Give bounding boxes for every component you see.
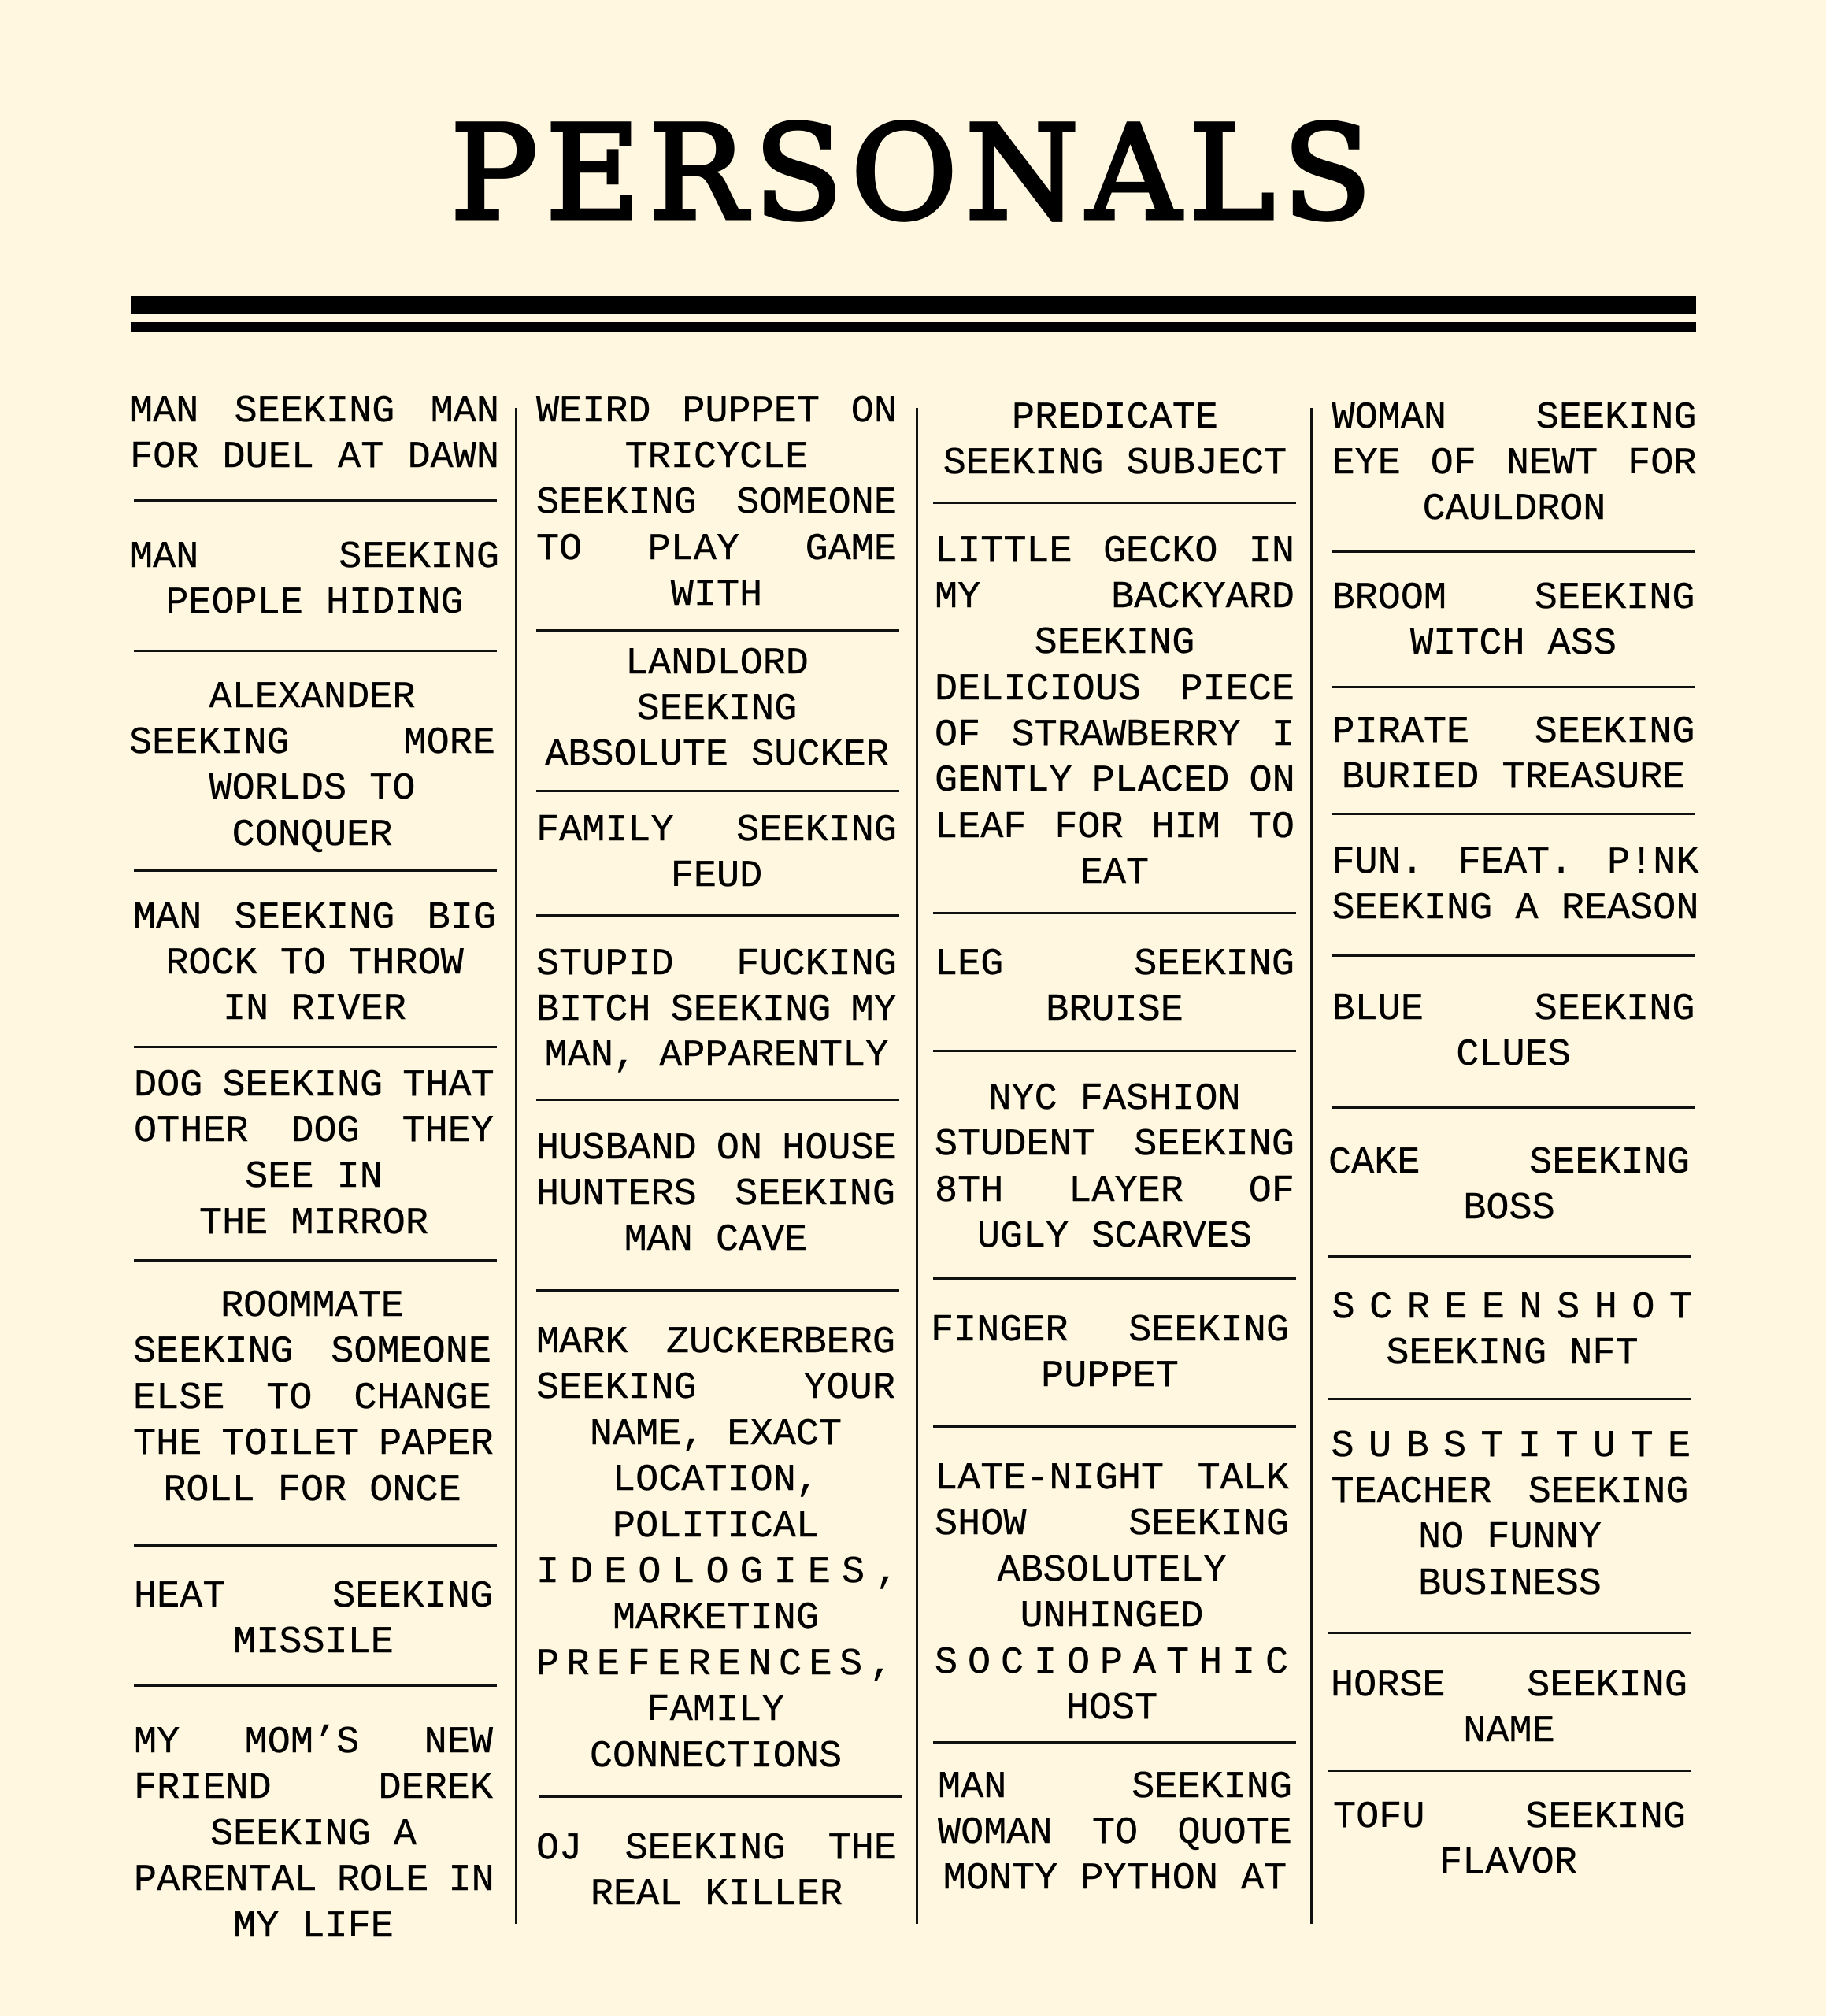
ad: finger seeking puppet bbox=[931, 1309, 1289, 1398]
ad: finger seeking puppet: PUPPET bbox=[1041, 1354, 1179, 1398]
ad: my mom's new friend derek: MY MOM’S NEW bbox=[134, 1721, 493, 1764]
ad: man seeking woman to quote monty python bbox=[937, 1766, 1292, 1900]
ad: man seeking woman to quote monty python: WOMAN TO QUOTE bbox=[938, 1811, 1292, 1855]
ad: stupid bitch seeking my man: MAN, APPARENTLY bbox=[545, 1034, 888, 1077]
ad: little gecko seeking strawberry: DELICIOUS PIECE bbox=[935, 668, 1294, 711]
ad: alexander seeking more worlds: WORLDS TO bbox=[209, 767, 415, 810]
ad: tofu seeking flavor: FLAVOR bbox=[1439, 1841, 1577, 1884]
masthead double rule bbox=[131, 296, 1696, 332]
ad: blue seeking clues: BLUE SEEKING bbox=[1332, 988, 1695, 1030]
ad: mark zuckerberg seeking your data bbox=[536, 1321, 909, 1778]
ad: man seeking woman to quote monty python: MONTY PYTHON AT bbox=[943, 1857, 1287, 1900]
ad: tofu seeking flavor bbox=[1333, 1796, 1686, 1884]
ad: weird puppet on tricycle: WEIRD PUPPET ON bbox=[536, 389, 897, 433]
ad: horse seeking name: HORSE SEEKING bbox=[1331, 1663, 1687, 1707]
ad: landlord seeking absolute sucker: ABSOLUTE SUCKER bbox=[545, 733, 889, 776]
ad: man seeking man for duel: FOR DUEL AT DAWN bbox=[130, 435, 499, 479]
ad: man seeking man for duel bbox=[130, 389, 499, 479]
ad: broom seeking witch ass bbox=[1332, 576, 1695, 665]
ad: broom seeking witch ass: WITCH ASS bbox=[1410, 622, 1617, 665]
ad: nyc fashion student seeking scarves: UGLY SCARVES bbox=[977, 1215, 1252, 1258]
ad: little gecko seeking strawberry: SEEKING bbox=[1035, 621, 1194, 665]
ad: my mom's new friend derek: FRIEND DEREK bbox=[134, 1766, 493, 1810]
ad: late-night talk show seeking host: SOCIOPATHIC bbox=[935, 1641, 1298, 1684]
ad: stupid bitch seeking my man: BITCH SEEKING MY bbox=[536, 988, 897, 1032]
ad: nyc fashion student seeking scarves: STUDENT SEEKING bbox=[935, 1123, 1294, 1166]
ad: mark zuckerberg seeking your data: IDEOLOGIES, bbox=[536, 1551, 909, 1594]
ad: little gecko seeking strawberry bbox=[935, 529, 1295, 895]
ad: screenshot seeking nft: SEEKING NFT bbox=[1386, 1332, 1639, 1375]
ad: cake seeking boss: CAKE SEEKING bbox=[1328, 1140, 1690, 1184]
ad: alexander seeking more worlds: CONQUER bbox=[232, 813, 392, 857]
ad: woman seeking eye of newt bbox=[1332, 395, 1696, 531]
ad: stupid bitch seeking my man: STUPID FUCKING bbox=[536, 942, 897, 986]
ad: roommate seeking toilet paper changer: THE TOILET PAPER bbox=[133, 1422, 494, 1466]
ad: husband seeking man cave: MAN CAVE bbox=[624, 1218, 807, 1262]
ad: fun seeking a reason bbox=[1332, 841, 1699, 930]
ad: horse seeking name bbox=[1331, 1663, 1687, 1753]
ad: dog seeking dog in mirror: DOG SEEKING THAT bbox=[134, 1063, 494, 1107]
ad: broom seeking witch ass: BROOM SEEKING bbox=[1332, 576, 1695, 619]
ad: weird puppet on tricycle: TRICYCLE bbox=[625, 435, 808, 479]
ad: man seeking big rock bbox=[133, 896, 496, 1031]
ad: mark zuckerberg seeking your data: SEEKING YOUR bbox=[536, 1366, 895, 1410]
ad: leg seeking bruise: BRUISE bbox=[1046, 988, 1183, 1032]
ad: alexander seeking more worlds bbox=[129, 676, 495, 857]
ad: man seeking woman to quote monty python: MAN SEEKING bbox=[938, 1766, 1292, 1808]
ad: little gecko seeking strawberry: MY BACKYARD bbox=[935, 576, 1294, 619]
ad: husband seeking man cave: HUSBAND ON HOUSE bbox=[536, 1126, 897, 1170]
ad: leg seeking bruise: LEG SEEKING bbox=[935, 942, 1294, 986]
ad: nyc fashion student seeking scarves: 8TH LAYER OF bbox=[935, 1169, 1294, 1213]
ad: predicate seeking subject bbox=[943, 395, 1287, 485]
ad: mark zuckerberg seeking your data: LOCATION, bbox=[613, 1458, 819, 1502]
ad: dog seeking dog in mirror: SEE IN bbox=[245, 1155, 383, 1199]
ad: blue seeking clues: CLUES bbox=[1456, 1033, 1571, 1077]
ad: substitute teacher seeking no funny business: NO FUNNY bbox=[1418, 1516, 1602, 1559]
ad: little gecko seeking strawberry: GENTLY PLACED ON bbox=[935, 759, 1295, 802]
ad: heat seeking missile bbox=[134, 1575, 493, 1664]
ad: alexander seeking more worlds: SEEKING MORE bbox=[129, 721, 495, 765]
ad: mark zuckerberg seeking your data: NAME, EXACT bbox=[590, 1413, 842, 1456]
ad: late-night talk show seeking host: LATE-NIGHT TALK bbox=[935, 1457, 1289, 1500]
ad: mark zuckerberg seeking your data: MARK ZUCKERBERG bbox=[536, 1321, 895, 1364]
ad: dog seeking dog in mirror bbox=[134, 1063, 494, 1245]
ad: woman seeking eye of newt: EYE OF NEWT FOR bbox=[1332, 442, 1696, 485]
ad: substitute teacher seeking no funny business bbox=[1331, 1424, 1706, 1606]
ad: roommate seeking toilet paper changer: ELSE TO CHANGE bbox=[133, 1377, 491, 1420]
ad: leg seeking bruise bbox=[935, 942, 1294, 1032]
ad: landlord seeking absolute sucker: LANDLORD bbox=[625, 641, 809, 685]
ad: fun seeking a reason: FUN. FEAT. P!NK bbox=[1332, 841, 1699, 884]
ad: woman seeking eye of newt: CAULDRON bbox=[1423, 487, 1606, 531]
ad: nyc fashion student seeking scarves: NYC FASHION bbox=[988, 1077, 1241, 1121]
ad: weird puppet on tricycle bbox=[535, 389, 897, 617]
ad: man seeking big rock: IN RIVER bbox=[223, 988, 406, 1031]
ad: mark zuckerberg seeking your data: MARKETING bbox=[613, 1596, 819, 1640]
ad: weird puppet on tricycle: SEEKING SOMEONE bbox=[536, 481, 897, 524]
ad: pirate seeking buried treasure: BURIED TREASURE bbox=[1342, 756, 1685, 799]
ad: nyc fashion student seeking scarves bbox=[935, 1077, 1294, 1258]
ad: horse seeking name: NAME bbox=[1463, 1710, 1555, 1753]
ad: screenshot seeking nft bbox=[1332, 1285, 1707, 1375]
ad: man seeking people hiding: PEOPLE HIDING bbox=[165, 581, 464, 624]
ad: dog seeking dog in mirror: OTHER DOG THEY bbox=[134, 1110, 494, 1153]
ad: roommate seeking toilet paper changer: ROLL FOR ONCE bbox=[163, 1469, 461, 1512]
ad: my mom's new friend derek bbox=[134, 1721, 494, 1948]
ad: cake seeking boss: BOSS bbox=[1463, 1187, 1555, 1230]
ad: late-night talk show seeking host bbox=[935, 1457, 1298, 1730]
ad: mark zuckerberg seeking your data: FAMILY bbox=[647, 1688, 784, 1732]
ad: roommate seeking toilet paper changer: SEEKING SOMEONE bbox=[133, 1330, 491, 1373]
ad: mark zuckerberg seeking your data: CONNECTIONS bbox=[590, 1735, 842, 1778]
ad: man seeking big rock: MAN SEEKING BIG bbox=[133, 896, 496, 939]
ad: cake seeking boss bbox=[1328, 1140, 1690, 1230]
ad: little gecko seeking strawberry: EAT bbox=[1080, 851, 1149, 895]
ad: family seeking feud: FAMILY SEEKING bbox=[536, 808, 897, 852]
ad: man seeking people hiding: MAN SEEKING bbox=[130, 536, 499, 578]
ad: heat seeking missile: MISSILE bbox=[233, 1621, 394, 1664]
ad: oj seeking real killer: REAL KILLER bbox=[591, 1873, 843, 1916]
ad: family seeking feud bbox=[536, 808, 897, 898]
ad: late-night talk show seeking host: ABSOLUTELY bbox=[997, 1549, 1227, 1592]
ad: late-night talk show seeking host: UNHINGED bbox=[1020, 1595, 1203, 1638]
ad: alexander seeking more worlds: ALEXANDER bbox=[209, 676, 415, 718]
ad: late-night talk show seeking host: SHOW SEEKING bbox=[935, 1503, 1289, 1546]
ad: blue seeking clues bbox=[1332, 988, 1695, 1077]
ad: husband seeking man cave: HUNTERS SEEKING bbox=[536, 1173, 895, 1216]
ad: predicate seeking subject: SEEKING SUBJECT bbox=[943, 442, 1287, 485]
title: PERSONALS bbox=[450, 98, 1380, 249]
ad: little gecko seeking strawberry: OF STRAWBERRY I bbox=[935, 713, 1294, 757]
ad: mark zuckerberg seeking your data: POLITICAL bbox=[613, 1505, 819, 1548]
ad: tofu seeking flavor: TOFU SEEKING bbox=[1333, 1796, 1686, 1838]
ad: stupid bitch seeking my man bbox=[536, 942, 897, 1077]
ad: man seeking people hiding bbox=[130, 536, 499, 624]
ad: substitute teacher seeking no funny business: BUSINESS bbox=[1418, 1562, 1602, 1606]
ad: woman seeking eye of newt: WOMAN SEEKING bbox=[1332, 395, 1696, 439]
ad: man seeking man for duel: MAN SEEKING MAN bbox=[130, 389, 499, 433]
ad: pirate seeking buried treasure bbox=[1332, 710, 1695, 799]
ad: dog seeking dog in mirror: THE MIRROR bbox=[199, 1202, 428, 1245]
ad: my mom's new friend derek: SEEKING A bbox=[210, 1813, 417, 1856]
ad: landlord seeking absolute sucker bbox=[545, 641, 889, 776]
ad: my mom's new friend derek: MY LIFE bbox=[233, 1905, 394, 1948]
ad: late-night talk show seeking host: HOST bbox=[1066, 1687, 1157, 1730]
ad: finger seeking puppet: FINGER SEEKING bbox=[931, 1309, 1289, 1351]
ad: little gecko seeking strawberry: LEAF FOR HIM TO bbox=[935, 806, 1294, 849]
ad: weird puppet on tricycle: TO PLAY GAME bbox=[536, 528, 897, 571]
ad: roommate seeking toilet paper changer: ROOMMATE bbox=[220, 1284, 404, 1328]
ad: family seeking feud: FEUD bbox=[671, 854, 762, 898]
ad: pirate seeking buried treasure: PIRATE SEEKING bbox=[1332, 710, 1695, 753]
ad: my mom's new friend derek: PARENTAL ROLE IN bbox=[134, 1858, 494, 1902]
ad: husband seeking man cave bbox=[536, 1126, 897, 1262]
ad: substitute teacher seeking no funny business: TEACHER SEEKING bbox=[1331, 1470, 1688, 1514]
ad: weird puppet on tricycle: WITH bbox=[671, 573, 762, 617]
ad: fun seeking a reason: SEEKING A REASON bbox=[1332, 887, 1699, 930]
ad: little gecko seeking strawberry: LITTLE GECKO IN bbox=[935, 529, 1294, 573]
ad: landlord seeking absolute sucker: SEEKING bbox=[637, 687, 797, 731]
ad: heat seeking missile: HEAT SEEKING bbox=[134, 1575, 493, 1618]
ad: man seeking big rock: ROCK TO THROW bbox=[165, 942, 464, 985]
ad: roommate seeking toilet paper changer bbox=[133, 1284, 494, 1512]
ad: screenshot seeking nft: SCREENSHOT bbox=[1332, 1285, 1707, 1329]
ad: oj seeking real killer: OJ SEEKING THE bbox=[536, 1827, 897, 1870]
ad: substitute teacher seeking no funny business: SUBSTITUTE bbox=[1331, 1424, 1706, 1468]
ad: predicate seeking subject: PREDICATE bbox=[1012, 395, 1218, 439]
ad: mark zuckerberg seeking your data: PREFERENCES, bbox=[536, 1643, 900, 1686]
ad: oj seeking real killer bbox=[536, 1827, 897, 1916]
